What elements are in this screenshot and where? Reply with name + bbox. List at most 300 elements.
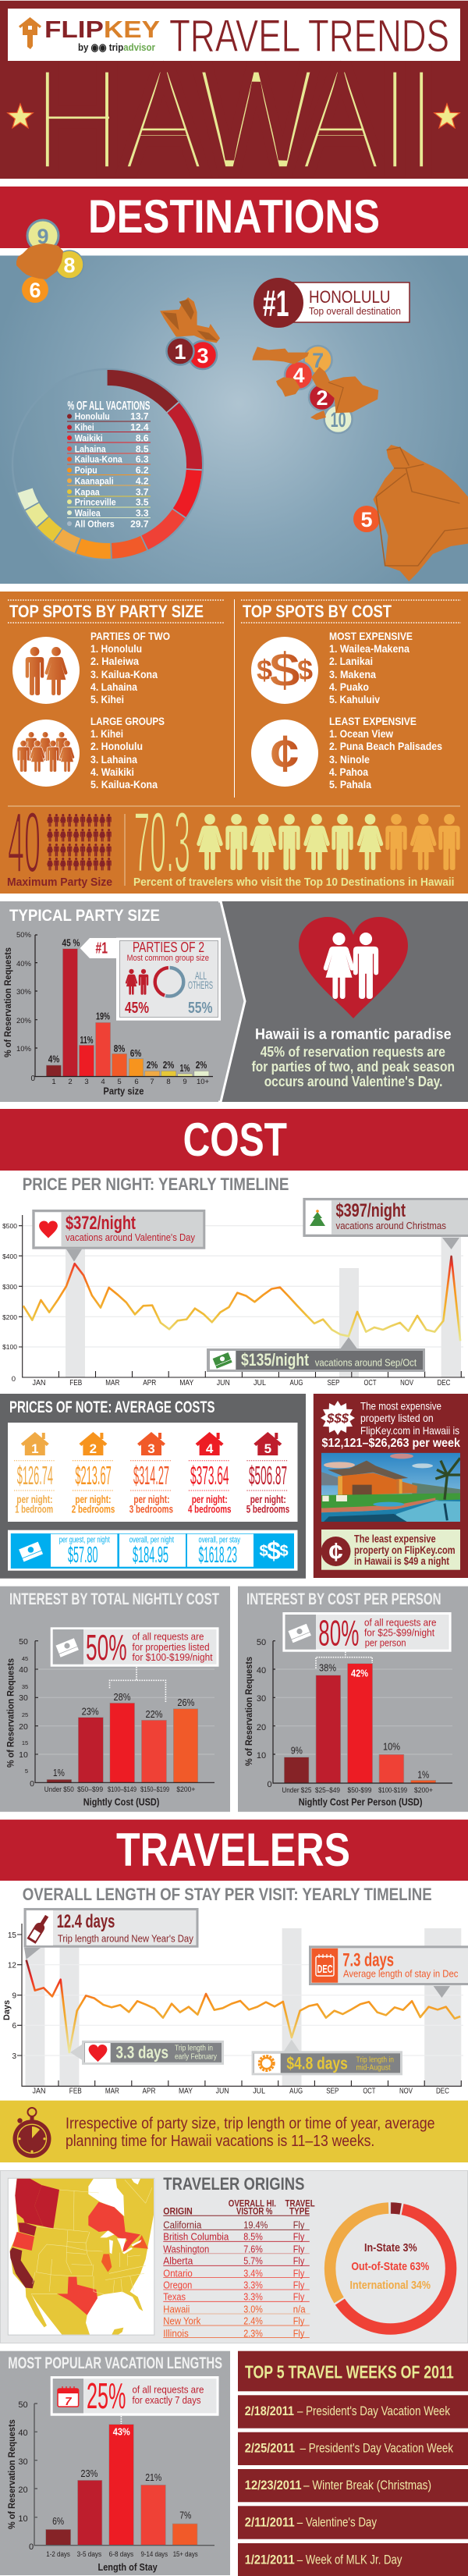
marker: 5: 5 [360,508,373,531]
bar chart: cost per person: Nightly Cost Per Person (USD) [299,1796,423,1807]
price card: 1 bedroom: per night: [16,1493,52,1505]
icon: couple [12,637,80,704]
bar chart: cost per person: Under $25 [282,1786,311,1795]
list: least expensive: 4. Pahoa [329,766,368,778]
bar chart: nightly cost [6,1637,214,1807]
line chart: price per night: MAR [105,1379,119,1387]
table: visitor origins: New York [163,2315,201,2327]
list: least expensive: 3. Ninole [329,753,370,766]
icon: December calendar: DEC [317,1963,333,1976]
list: least expensive: 2. Puna Beach Palisades [329,740,442,752]
list: least expensive [329,715,442,791]
panel: island map [0,220,468,584]
price card: 3 bedrooms [129,1432,173,1515]
photo: vacation property [321,1453,460,1522]
legend: percent of all vacations: % OF ALL VACATIONS [67,400,151,413]
bar chart: vacation lengths: Length of Stay [98,2561,158,2573]
table: visitor origins: 19.4% [243,2219,268,2231]
bar chart: cost per person: $200+ [414,1786,433,1795]
bar chart: nightly cost: 40 [19,1665,28,1675]
bar chart: party size: 2% [196,1059,207,1071]
callout: Sep/Oct price: vacations around Sep/Oct [315,1358,417,1369]
callout: 80 percent: of all requests are [364,1616,437,1628]
section banner: cost [0,1109,468,1171]
price card: 3 bedrooms: per night: [133,1493,169,1505]
price card: 2 bedrooms: per night: [75,1493,111,1505]
table: visitor origins: Fly [293,2315,305,2327]
bar chart: cost per person: % of Reservation Requests [245,1657,254,1766]
line chart: price per night: $200 [2,1313,17,1321]
icon: heart with couple [299,917,408,1018]
chart: origin share donut: In-State 3% [364,2241,417,2254]
table: visitor origins: n/a [293,2303,306,2315]
bar chart: party size: % of Reservation Requests [4,947,13,1057]
bar chart: party size: 2% [163,1059,175,1071]
table: visitor origins: Fly [293,2267,305,2279]
callout: 80 percent [282,1612,452,1653]
callout: #1 Honolulu: #1 [263,282,289,324]
price card: 2 bedrooms: 2 bedrooms [72,1503,115,1515]
bar chart: party size: 20% [16,1017,32,1025]
line chart: length of stay: 3 [12,2052,16,2061]
callout: December stay [310,1947,468,1998]
text: most expensive property: $12,121–$26,263 per week [321,1437,460,1450]
panel: prices of note: $506.87 [249,1461,287,1490]
chart: origin share donut: International 34% [349,2279,431,2292]
line chart: price per night: 0 [12,1375,16,1384]
panel: romantic paradise [222,901,468,1102]
bar chart: party size [4,931,213,1097]
bar chart: nightly cost: 50 [19,1637,28,1647]
marker: 7: 7 [312,349,324,372]
line chart: length of stay: MAY [179,2087,193,2096]
legend: percent of all vacations: Kapaa [75,487,100,498]
price card: 4 bedrooms: 4 [206,1441,214,1456]
price card: 1 bedroom: 1 [31,1441,39,1456]
row: 12/23/2011 [238,2469,468,2502]
panel: prices of note: $213.67 [75,1461,112,1490]
callout: mid-August stay [253,2040,401,2074]
chart: origin share donut [330,2208,451,2329]
stat: percent visiting top 10: 70.3 [134,794,190,891]
table: visitor origins: British Columbia [163,2231,229,2243]
bar chart: vacation lengths: 23% [80,2468,98,2479]
bar chart: nightly cost: 45 [22,1655,28,1662]
list: parties of two: PARTIES OF TWO [90,630,170,642]
bar chart: nightly cost: $100–$149 [108,1785,136,1794]
price card: 1 bedroom: 1 bedroom [15,1503,53,1515]
callout: early February stay: 3.3 days [115,2042,168,2062]
bar chart: party size: 3 [84,1078,89,1086]
bar chart: nightly cost: Under $50 [44,1785,74,1794]
callout: #1 Honolulu: HONOLULU [309,287,390,307]
marker: 2 [309,384,335,410]
icon: dollar signs: $ [259,1543,268,1560]
bar chart: nightly cost: 30 [19,1693,28,1703]
table: visitor origins: 3.3% [243,2279,263,2291]
icon: dollar signs: $ [279,1543,289,1560]
panel: prices of note [0,1394,306,1579]
table: visitor origins: Fly [293,2291,305,2303]
bar chart: party size: 9 [183,1078,187,1086]
legend: percent of all vacations: Princeville [75,496,116,507]
bar chart: party size: 30% [16,988,32,997]
callout: 50 percent: for properties listed [133,1641,210,1653]
list: most expensive [329,630,413,705]
row: 12/23/2011: 12/23/2011 [245,2478,301,2493]
panel: prices of note: $373.64 [190,1461,229,1490]
callout: December stay: 7.3 days [342,1949,394,1970]
marker: 10 [324,405,353,433]
marker: 8 [55,250,83,279]
bar chart: party size: 8 [166,1078,171,1086]
bar chart: vacation lengths: 3-5 days [77,2550,101,2559]
table: visitor origins: VISTOR % [236,2206,273,2217]
icon: left star [8,104,33,128]
line chart: price per night: JUN [217,1379,230,1387]
bar chart: party size: 10+ [197,1078,210,1086]
bar chart: nightly cost: 1% [53,1767,65,1778]
price card: 4 bedrooms: per night: [192,1493,228,1505]
bar chart: party size: 45 % [62,937,80,949]
legend: percent of all vacations: 4.2 [136,476,149,487]
bar chart: vacation lengths: 43% [113,2426,130,2438]
callout: 25 percent: for exactly 7 days [133,2394,201,2406]
legend: percent of all vacations: Kihei [75,421,94,432]
line chart: length of stay: JAN [33,2087,45,2096]
bar chart: nightly cost: $150–$199 [140,1785,169,1794]
icon: cent sign: ¢ [271,724,299,782]
bar chart: vacation lengths: 30 [18,2457,28,2467]
list: most expensive: 1. Wailea-Makena [329,642,410,655]
text: planning time: Irrespective of party size, trip length or time of year, average [66,2115,435,2132]
flag: #1 [80,938,119,958]
table: visitor origins: OVERALL HI. [229,2198,276,2209]
table: visitor origins: Fly [293,2244,305,2255]
table: visitor origins: Fly [293,2255,305,2267]
panel: top 5 travel weeks [238,2351,468,2576]
icon: group [12,720,80,787]
callout: early February stay: Trip length in [175,2045,213,2053]
line chart: price per night: JUL [254,1379,266,1387]
legend: percent of all vacations: 3.5 [136,496,149,507]
bar chart: vacation lengths: 20 [18,2485,28,2495]
list: large groups: 4. Waikiki [90,766,134,778]
line chart: price per night: SEP [328,1379,340,1387]
list: parties of two [90,630,170,705]
chart: share donut [155,968,183,997]
panel: prices of note: $314.27 [133,1461,169,1490]
island: Kauai [16,243,63,279]
bar chart: party size: 1 [51,1078,56,1086]
heading: typical party size: TYPICAL PARTY SIZE [9,907,160,925]
islands [160,297,468,581]
heading: total nightly cost: INTEREST BY TOTAL NIGHTLY COST [9,1590,219,1608]
legend: percent of all vacations: Poipu [75,465,98,476]
map: North America origin states [8,2178,154,2335]
summary strip: averages: $1618.23 [198,1543,237,1568]
panel: property extremes [313,1394,468,1578]
legend: percent of all vacations: 8.5 [136,443,149,454]
bar chart: vacation lengths: 9-14 days [141,2550,168,2559]
marker: 2: 2 [316,386,328,410]
text: planning time [66,2115,435,2150]
price card: 2 bedrooms [72,1432,115,1515]
bar chart: vacation lengths: % of Reservation Requests [8,2419,17,2529]
row: 1/21/2011: 1/21/2011 [245,2552,295,2567]
marker: 6 [22,276,48,303]
bar chart: vacation lengths: 15+ days [173,2550,198,2559]
list: most expensive: 3. Makena [329,668,376,680]
callout: Christmas price [304,1199,468,1249]
line chart: length of stay: MAR [105,2087,119,2096]
bar chart: nightly cost: 23% [82,1705,99,1717]
bar chart: party size: 2% [147,1059,158,1071]
icon: calendar: 7 [65,2395,72,2408]
line chart: length of stay: 15 [8,1931,16,1940]
list: least expensive: 5. Pahala [329,778,371,791]
bar chart: nightly cost: 10 [19,1750,28,1760]
bar chart: party size: 19% [96,1011,110,1022]
text: most expensive property [321,1400,460,1450]
icon: dollar signs [259,1537,289,1565]
price card: 5 bedrooms: 5 [264,1441,271,1456]
row: 2/18/2011 [238,2395,468,2429]
summary strip: averages: overall, per night [129,1536,174,1545]
panel: interest by total nightly cost [0,1586,230,1812]
callout: 25 percent: 25% [87,2375,126,2416]
bar chart: vacation lengths: 7% [179,2510,192,2521]
section banner: travelers [0,1820,468,1881]
callout: Valentine's Day price: $372/night [66,1213,136,1234]
marker: 5 [353,506,380,532]
bar chart: nightly cost: 35 [22,1683,28,1690]
heading: prices of note: PRICES OF NOTE: AVERAGE COSTS [9,1398,215,1416]
bar chart: party size: 7 [150,1078,154,1086]
chart: origin share donut: Out-of-State 63% [351,2260,429,2273]
panel: planning time [0,2101,468,2162]
bar chart: nightly cost: $50–$99 [77,1785,103,1794]
bar chart: vacation lengths: 6% [52,2515,64,2527]
icon: stopwatch [12,2108,51,2158]
bar chart: party size: Party size [103,1086,144,1097]
text: romantic paradise: Hawaii is a romantic paradise [255,1027,452,1043]
list: large groups: LARGE GROUPS [90,715,165,727]
table: visitor origins: Oregon [163,2279,192,2291]
marker: 9 [27,220,58,251]
callout: least expensive property: The least expensive [354,1533,436,1545]
line chart: price per night: OCT [363,1379,376,1387]
callout: Sep/Oct price: $135/night [241,1350,310,1370]
callout: #1 Honolulu: Top overall destination [309,305,401,317]
icon: champagne bottle [27,1913,51,1944]
list: parties of two: 5. Kihei [90,693,124,705]
icon: three dollar signs [251,637,318,704]
icon: christmas tree [310,1210,325,1226]
bar chart: vacation lengths: 6-8 days [109,2550,133,2559]
callout: parties of 2: OTHERS [188,979,213,991]
line chart: length of stay: JUL [253,2087,266,2096]
row: 1/21/2011 [238,2543,468,2576]
bar chart: nightly cost: 25 [22,1711,28,1718]
icon: three dollar signs: $ [269,644,300,698]
section banner: cost: COST [183,1114,287,1166]
text: romantic paradise: occurs around Valentine's Day. [264,1074,443,1089]
stat: maximum party size: Maximum Party Size [7,876,112,889]
price card: 5 bedrooms: 5 bedrooms [246,1503,289,1515]
panel: top spots [0,592,468,894]
bar chart: vacation lengths: 40 [18,2429,28,2438]
marker: 7 [304,346,332,374]
bar chart: cost per person: 0 [268,1780,272,1789]
section banner: destinations [0,187,468,248]
table: visitor origins: 2.4% [243,2315,263,2327]
bar chart: party size: 50% [16,931,32,940]
marker: 4 [285,361,313,389]
summary strip: averages: overall, per stay [198,1536,240,1545]
bar chart: nightly cost: 22% [145,1708,163,1720]
chart: share of all vacations donut [12,369,203,560]
bar chart: party size: 11% [80,1034,94,1046]
line chart: length of stay: NOV [399,2087,413,2096]
row: 1/21/2011: – Week of MLK Jr. Day [297,2552,402,2567]
callout: 50 percent: 50% [86,1627,127,1668]
legend: percent of all vacations: 3.7 [136,487,149,498]
price card: 1 bedroom [14,1432,55,1515]
bar chart: nightly cost: 28% [114,1691,131,1703]
text: most expensive property: property listed on [360,1412,434,1424]
line chart: length of stay [2,1924,463,2096]
line chart: price per night: $100 [2,1343,17,1351]
line chart: price per night: DEC [437,1379,451,1387]
callout: New Year's stay [24,1909,197,1960]
callout: #1 Honolulu [254,278,410,328]
bar chart: nightly cost: $200+ [176,1785,196,1794]
bar chart: party size: 1% [179,1062,190,1074]
row: 2/18/2011: 2/18/2011 [245,2404,294,2418]
list: large groups [90,715,165,791]
by tripadvisor logo: by ◉◉ tripadvisor [78,41,155,53]
list: large groups: 5. Kailua-Kona [90,778,158,791]
logo and title strip [8,9,460,62]
callout: mid-August stay: Trip length in [356,2055,394,2064]
callout: 50 percent: of all requests are [133,1631,204,1643]
row: 12/23/2011: – Winter Break (Christmas) [303,2478,431,2493]
legend: percent of all vacations: All Others [75,518,115,529]
callout: mid-August stay: mid-August [356,2063,391,2072]
title: Hawaii: HAWAII [31,35,439,204]
legend: percent of all vacations: Wailea [75,507,101,518]
panel: prices of note: $126.74 [17,1461,53,1490]
line chart: length of stay: FEB [69,2087,82,2096]
stat: maximum party size: 40 [8,794,41,891]
panel: traveler origins [0,2171,468,2343]
callout: parties of 2: 45% [125,1000,149,1017]
list: most expensive: 4. Puako [329,680,369,693]
icon: dollar signs: $ [267,1537,281,1565]
icon: cent sign [251,720,318,787]
callout: 50 percent: for $100-$199/night [133,1651,213,1663]
line chart: length of stay: AUG [289,2087,303,2096]
row: 2/11/2011 [238,2506,468,2539]
line chart: length of stay: 12 [8,1962,16,1970]
icon: sun [259,2055,274,2071]
callout: 25 percent: of all requests are [133,2384,204,2396]
price card: 4 bedrooms [188,1432,232,1515]
bar chart: cost per person: 10% [383,1740,400,1752]
bar chart: nightly cost: 0 [30,1779,34,1789]
table: visitor origins: Texas [163,2291,186,2303]
FlipKey logo: FLIP KEY [44,16,160,43]
section banner: destinations: DESTINATIONS [88,190,380,243]
list: least expensive: 1. Ocean View [329,727,393,740]
table: visitor origins: Ontario [163,2267,193,2279]
callout: early February stay [70,2041,223,2063]
bar chart: nightly cost: 5 [25,1768,28,1775]
bar chart: nightly cost: 20 [19,1722,28,1732]
callout: early February stay: early February [175,2052,217,2061]
line chart: length of stay: OCT [363,2087,375,2096]
bar chart: nightly cost: % of Reservation Requests [6,1658,16,1768]
bar chart: cost per person: $50-$99 [348,1786,371,1795]
bar chart: party size: 4 [101,1078,105,1086]
callout: New Year's stay: 12.4 days [57,1911,115,1932]
line chart: price per night: $300 [2,1283,17,1291]
bar chart: cost per person: 20 [257,1723,266,1732]
price card: 5 bedrooms [246,1432,289,1515]
callout: 50 percent [51,1627,218,1668]
bar chart: party size: 10% [16,1045,32,1053]
stat: percent visiting top 10 [133,794,460,891]
legend: percent of all vacations: Lahaina [75,443,106,454]
line chart: price per night [2,1215,465,1387]
heading: vacation lengths: MOST POPULAR VACATION LENGTHS [8,2354,222,2372]
line chart: length of stay: DEC [436,2087,449,2096]
legend: percent of all vacations: Honolulu [75,410,110,421]
bar chart: nightly cost: 15 [22,1739,28,1746]
text: planning time: planning time for Hawaii vacations is 11–13 weeks. [66,2133,374,2150]
bar chart: cost per person: 10 [257,1751,266,1761]
line chart: length of stay: APR [142,2087,156,2096]
icon: three dollar signs: $ [297,654,313,686]
table: visitor origins: Alberta [163,2255,193,2267]
marker: 3: 3 [197,344,209,368]
bar chart: vacation lengths: 10 [18,2514,28,2524]
panel: price per night timeline [2,1174,468,1387]
row: 2/11/2011: 2/11/2011 [245,2514,295,2529]
line chart: price per night: NOV [400,1379,413,1387]
bar chart: vacation lengths: 1-2 days [46,2550,70,2559]
bar chart: cost per person [245,1638,452,1807]
bar chart: vacation lengths [8,2400,214,2573]
heading: top 5 travel weeks [238,2351,468,2391]
bar chart: cost per person: 30 [257,1694,266,1704]
icon: price burst: $$$ [326,1411,349,1426]
line chart: price per night: MAY [179,1379,193,1387]
line chart: price per night: $500 [2,1222,17,1230]
summary strip: averages [8,1530,298,1571]
list: parties of two: 1. Honolulu [90,642,142,655]
callout: 25 percent [51,2375,218,2416]
bar chart: cost per person: 40 [257,1666,266,1675]
panel: typical party size [0,901,245,1102]
legend: percent of all vacations: Kaanapali [75,476,114,487]
list: most expensive: MOST EXPENSIVE [329,630,413,642]
bar chart: party size: 4% [48,1053,60,1065]
bar chart: party size: 6 [134,1078,139,1086]
table: visitor origins: Illinois [163,2327,189,2339]
legend: percent of all vacations: 29.7 [130,518,149,529]
